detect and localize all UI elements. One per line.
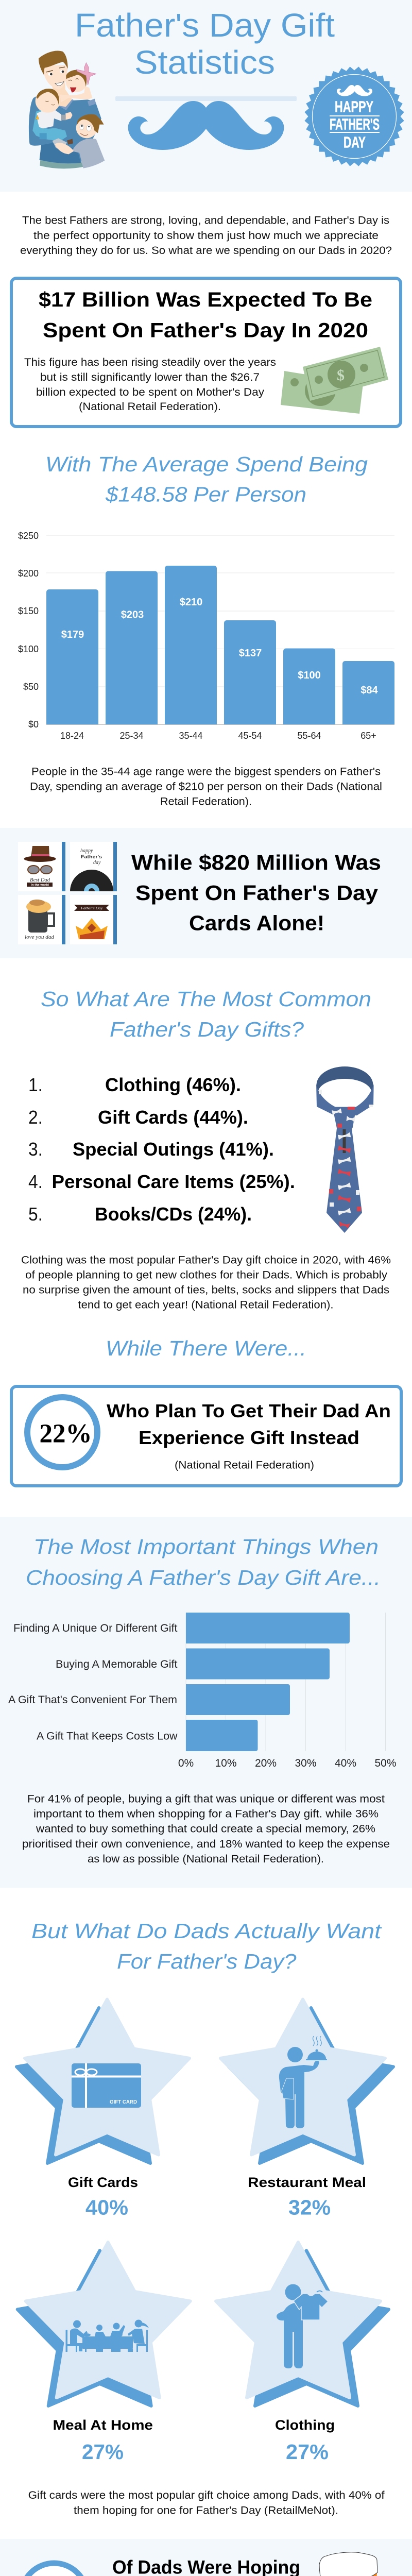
- text block: (National Retail Federation).: [79, 401, 221, 413]
- bar chart: spend by age: $250: [18, 531, 39, 541]
- text block: intro: everything they do for us. So what are we spending on our Dads in 2020?: [20, 245, 392, 257]
- text block: billion expected to be spent on Mother's Day: [36, 386, 265, 398]
- heading: While $820 Million Was: [131, 851, 381, 874]
- star: restaurant meal: [220, 1999, 393, 2219]
- heading: what dads want: [31, 1919, 382, 1973]
- icon: card with hat and glasses: In the world: [31, 884, 49, 887]
- icon: card with beer: love you dad: [25, 934, 55, 940]
- label: Meal At Home: [53, 2417, 153, 2433]
- text block: gift card note: [28, 2489, 385, 2516]
- list: top five gifts: 1.: [28, 1074, 43, 1095]
- icon: card with beer: [18, 895, 65, 944]
- bar chart: spend by age: 45-54: [238, 731, 262, 741]
- icon: card with record: Father's: [81, 854, 102, 859]
- text block: [22, 1793, 390, 1865]
- bar chart: priorities: [8, 1613, 397, 1769]
- text block: clothing note: of people planning to get new clothes for their Dads. Which is probably: [25, 1269, 388, 1281]
- heading: [131, 851, 381, 935]
- icon: waiter: [279, 2036, 327, 2128]
- heading: Spent On Father's Day In 2020: [43, 319, 368, 342]
- title: Father's Day Gift: [75, 7, 335, 44]
- text block: age range note: People in the 35-44 age range were the biggest spenders on Father's: [31, 766, 381, 778]
- panel: cards callout: [0, 828, 412, 958]
- bar chart: spend by age: $179: [61, 629, 84, 640]
- heading: Cards Alone!: [189, 911, 324, 935]
- text block: age range note: Day, spending an average of $210 per person on their Dads (National: [30, 781, 382, 793]
- badge: Happy Father's Day: FATHER'S: [330, 115, 380, 133]
- text block: gift card note: them hoping for one for Father's Day (RetailMeNot).: [74, 2505, 338, 2516]
- heading: [26, 1535, 381, 1589]
- heading: [107, 1400, 391, 1448]
- heading: most common gifts: So What Are The Most Common: [41, 987, 371, 1011]
- icon: moustache: [128, 101, 284, 150]
- stat ring: 22%: [39, 1419, 92, 1449]
- bar chart: spend by age: 18-24: [60, 731, 84, 741]
- text block: This figure has been rising steadily over the years: [24, 357, 276, 368]
- panel: most important things: [0, 1517, 412, 1888]
- icon: banknotes: [281, 347, 388, 414]
- list: top five gifts: Gift Cards (44%).: [98, 1107, 248, 1128]
- bar chart: spend by age: $0: [28, 719, 39, 730]
- heading: Choosing A Father's Day Gift Are...: [26, 1566, 381, 1589]
- icon: card with crown: [70, 895, 117, 944]
- heading: $17 Billion Was Expected To Be: [39, 289, 372, 311]
- heading: The Most Important Things When: [33, 1535, 379, 1558]
- icon: card with record: [70, 842, 117, 891]
- icon: person holding shirt: [277, 2284, 328, 2368]
- icon: necktie: [316, 1066, 374, 1233]
- bar chart: spend by age: $100: [298, 670, 321, 681]
- text block: clothing note: tend to get each year! (National Retail Federation).: [78, 1299, 334, 1311]
- bar chart: priorities: 50%: [374, 1757, 397, 1769]
- bar chart: priorities: 20%: [255, 1757, 277, 1769]
- bar chart: spend by age: $137: [239, 648, 262, 659]
- list: top five gifts: Books/CDs (24%).: [95, 1204, 252, 1225]
- text block: age range note: [30, 766, 382, 808]
- bar chart: spend by age: 35-44: [179, 731, 203, 741]
- text block: important to them when shopping for a Father's Day gift. while 36%: [33, 1808, 379, 1820]
- bar chart: spend by age: $84: [360, 685, 379, 696]
- icon: card with hat and glasses: Best Dad: [30, 877, 50, 883]
- value: 32%: [288, 2196, 331, 2219]
- icon: banknotes: $: [337, 367, 345, 384]
- bar chart: priorities: 0%: [178, 1757, 194, 1769]
- list: top five gifts: Clothing (46%).: [105, 1074, 241, 1095]
- text block: age range note: Retail Federation).: [160, 796, 252, 808]
- heading: Who Plan To Get Their Dad An: [107, 1400, 391, 1421]
- text block: prioritised their own convenience, and 18% wanted to keep the expense: [22, 1838, 390, 1850]
- badge: Happy Father's Day: [304, 66, 404, 166]
- heading: average spend: $148.58 Per Person: [105, 482, 306, 506]
- heading: most common gifts: Father's Day Gifts?: [110, 1018, 304, 1041]
- bar chart: spend by age: $50: [23, 682, 39, 692]
- stat ring: [21, 2563, 87, 2576]
- heading: what dads want: But What Do Dads Actually Want: [31, 1919, 382, 1943]
- divider bar: [115, 96, 297, 101]
- text block: as low as possible (National Retail Federation).: [88, 1853, 324, 1865]
- bar chart: priorities: Finding A Unique Or Different Gift: [13, 1622, 178, 1634]
- panel: header: [0, 0, 412, 192]
- bar chart: priorities: 30%: [295, 1757, 317, 1769]
- list: top five gifts: Special Outings (41%).: [73, 1139, 274, 1160]
- list: top five gifts: 5.: [28, 1204, 43, 1225]
- icon: gift card: GIFT CARD: [110, 2099, 137, 2105]
- list: top five gifts: 2.: [28, 1107, 43, 1128]
- bar chart: spend by age: 25-34: [119, 731, 144, 741]
- text block: intro: the perfect opportunity to show them just how much we appreciate: [33, 230, 379, 242]
- bar chart: spend by age: $203: [121, 609, 144, 620]
- text block: For 41% of people, buying a gift that was unique or different was most: [27, 1793, 385, 1805]
- heading: average spend: With The Average Spend Being: [45, 452, 368, 476]
- illustration: father with three children: [29, 51, 105, 168]
- label: Clothing: [275, 2417, 335, 2433]
- bar chart: priorities: Buying A Memorable Gift: [56, 1658, 178, 1670]
- source: (National Retail Federation): [175, 1459, 314, 1471]
- panel: 22% experience gift: [11, 1386, 401, 1486]
- icon: card with crown: Father's Day: [80, 906, 103, 910]
- badge: Happy Father's Day: HAPPY: [335, 98, 373, 115]
- bar chart: spend by age: $100: [18, 644, 39, 654]
- label: Gift Cards: [68, 2175, 138, 2190]
- value: 40%: [85, 2196, 128, 2219]
- list: top five gifts: Personal Care Items (25%).: [52, 1171, 295, 1192]
- icon: beer mug with moustache: [318, 2552, 400, 2576]
- bar chart: spend by age: 65+: [360, 731, 376, 741]
- heading: [39, 289, 372, 342]
- bar chart: priorities: A Gift That's Convenient For Them: [8, 1694, 177, 1706]
- bar chart: spend by age: $200: [18, 568, 39, 579]
- icon: card with record: day: [93, 860, 101, 866]
- icon: card with hat and glasses: [18, 842, 65, 891]
- panel: $17 billion callout: [11, 278, 401, 427]
- icon: gift card: [72, 2063, 141, 2108]
- heading: most common gifts: [41, 987, 371, 1041]
- heading: what dads want: For Father's Day?: [117, 1950, 297, 1973]
- stat ring: [27, 1397, 97, 1467]
- icon: family at table: [66, 2319, 149, 2352]
- badge: Happy Father's Day: DAY: [344, 133, 366, 151]
- text block: wanted to buy something that could create a special memory, 26%: [36, 1823, 375, 1835]
- bar chart: spend by age: $150: [18, 606, 39, 616]
- bar chart: spend by age: 55-64: [297, 731, 321, 741]
- text block: clothing note: Clothing was the most popular Father's Day gift choice in 2020, with 46%: [21, 1254, 391, 1266]
- star: gift cards: [16, 1999, 190, 2219]
- label: Restaurant Meal: [248, 2175, 366, 2190]
- star: meal at home: [18, 2242, 191, 2464]
- text block: intro: [20, 215, 392, 257]
- value: 27%: [286, 2440, 329, 2464]
- text block: gift card note: Gift cards were the most popular gift choice among Dads, with 40% of: [28, 2489, 385, 2501]
- heading: Experience Gift Instead: [139, 1427, 359, 1448]
- bar chart: priorities: 40%: [335, 1757, 356, 1769]
- text block: but is still significantly lower than the $26.7: [40, 371, 260, 383]
- title: [75, 7, 335, 81]
- list: top five gifts: [28, 1074, 295, 1225]
- list: top five gifts: 4.: [28, 1171, 43, 1192]
- bar chart: spend by age: [18, 531, 394, 741]
- list: top five gifts: 3.: [28, 1139, 43, 1160]
- heading: Spent On Father's Day: [135, 881, 378, 905]
- text block: [24, 357, 276, 413]
- value: 27%: [82, 2440, 124, 2464]
- icon: card with record: happy: [80, 848, 93, 854]
- star: clothing: [216, 2242, 389, 2464]
- text block: clothing note: no surprise given the amount of ties, belts, socks and slippers that Dads: [23, 1284, 389, 1296]
- panel: alcohol callout: [0, 2539, 412, 2576]
- text block: clothing note: [21, 1254, 391, 1311]
- bar chart: priorities: A Gift That Keeps Costs Low: [37, 1730, 178, 1742]
- heading: average spend: [45, 452, 368, 506]
- heading: while there were: While There Were...: [106, 1336, 306, 1360]
- title: Statistics: [134, 44, 275, 81]
- bar chart: priorities: 10%: [215, 1757, 237, 1769]
- bar chart: spend by age: $210: [180, 597, 202, 608]
- text block: intro: The best Fathers are strong, loving, and dependable, and Father's Day is: [22, 215, 389, 227]
